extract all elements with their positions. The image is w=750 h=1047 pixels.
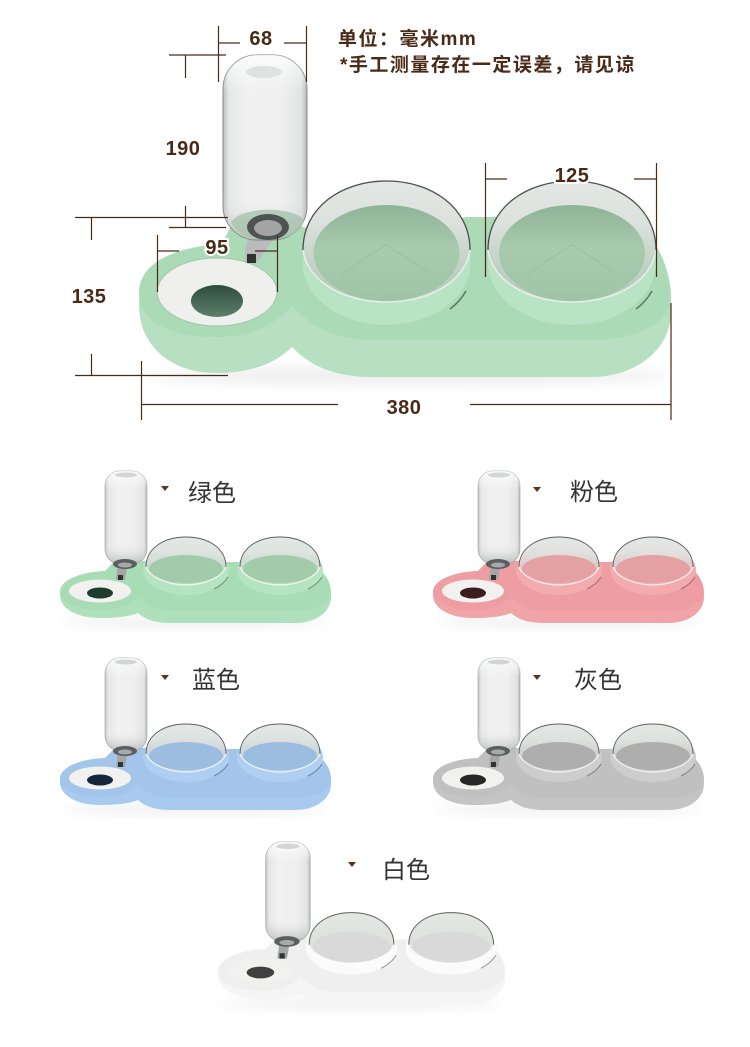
main product: green feeder with dimensions [139, 55, 675, 386]
measurement disclaimer: *手工测量存在一定误差，请见谅 [340, 53, 636, 76]
bowl two [488, 181, 656, 325]
water bottle [223, 55, 307, 240]
colour option: green [60, 471, 331, 628]
colour option: gray [433, 658, 704, 815]
colour option: white: 白色 [382, 857, 430, 884]
colour option: blue [60, 658, 331, 815]
unit note: 单位：毫米mm [338, 27, 477, 50]
base shadow [145, 366, 675, 386]
bowl one [302, 181, 470, 325]
dimension: bottle height 190: 190 [166, 138, 200, 160]
dimension: base length 380: 380 [387, 397, 421, 419]
feeder base side [139, 217, 671, 377]
bottle connector [245, 233, 272, 263]
water tray [157, 258, 277, 326]
colour option: green: 绿色 [188, 480, 236, 507]
colour option: white [218, 842, 505, 1010]
feeder base top face [139, 217, 671, 340]
dimension lines [75, 26, 671, 420]
dimension: tray diameter 95: 95 [205, 237, 229, 259]
colour option: pink: 粉色 [570, 479, 618, 506]
dimension: base depth 135: 135 [72, 286, 106, 308]
colour option: pink [433, 471, 704, 628]
dimension: bottle width 68: 68 [249, 28, 273, 50]
tray opening [191, 285, 243, 317]
dimension: bowl diameter 125: 125 [555, 165, 589, 187]
colour option: blue: 蓝色 [192, 667, 240, 694]
colour option: gray: 灰色 [574, 667, 622, 694]
